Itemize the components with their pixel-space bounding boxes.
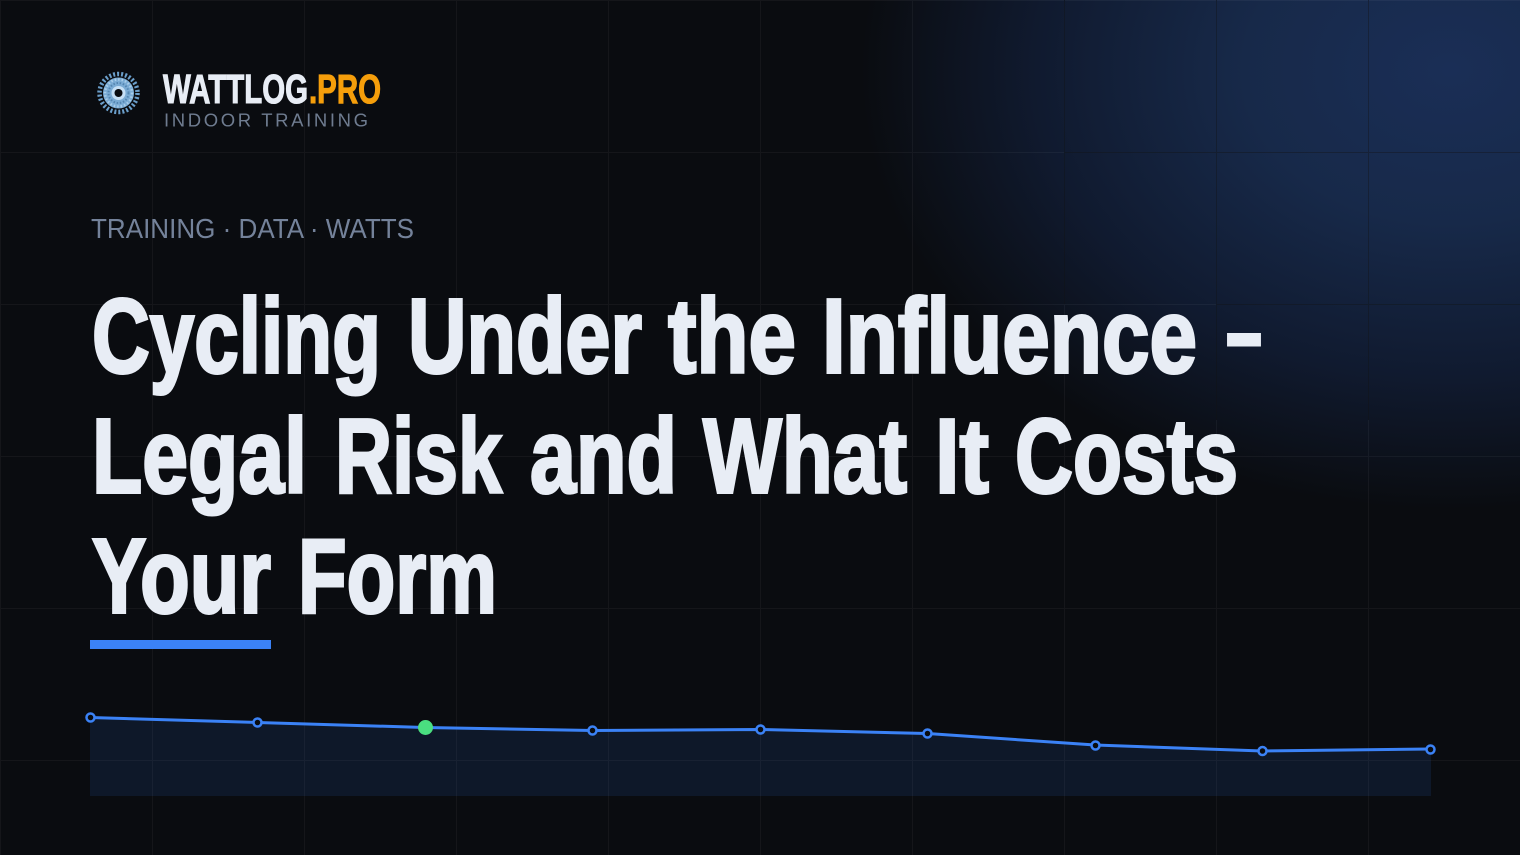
title: and xyxy=(530,398,677,516)
title: Costs xyxy=(1015,398,1238,516)
title: Cycling xyxy=(92,278,381,396)
title: Risk xyxy=(335,398,503,516)
chart highlighted point xyxy=(418,720,433,735)
chart area fill xyxy=(90,718,1431,796)
title: Form xyxy=(298,518,497,636)
title: – xyxy=(1226,273,1262,391)
title xyxy=(92,273,1262,636)
eyebrow: category line: TRAINING · DATA · WATTS xyxy=(91,213,414,244)
line chart: power trend xyxy=(86,714,1434,796)
title: It xyxy=(935,398,989,516)
chart line xyxy=(90,718,1430,751)
logo tagline: INDOOR TRAINING xyxy=(164,110,368,130)
title underline accent xyxy=(90,640,271,649)
chart data points xyxy=(86,714,1434,755)
title: Your xyxy=(92,518,271,636)
logo wordmark: WATTLOG xyxy=(163,66,308,112)
title: the xyxy=(668,278,796,396)
title: Under xyxy=(408,278,642,396)
title: Influence xyxy=(822,278,1197,396)
logo wordmark: .PRO xyxy=(309,66,381,112)
title: Legal xyxy=(92,398,307,516)
title: What xyxy=(703,398,907,516)
logo: cog icon xyxy=(100,74,138,112)
